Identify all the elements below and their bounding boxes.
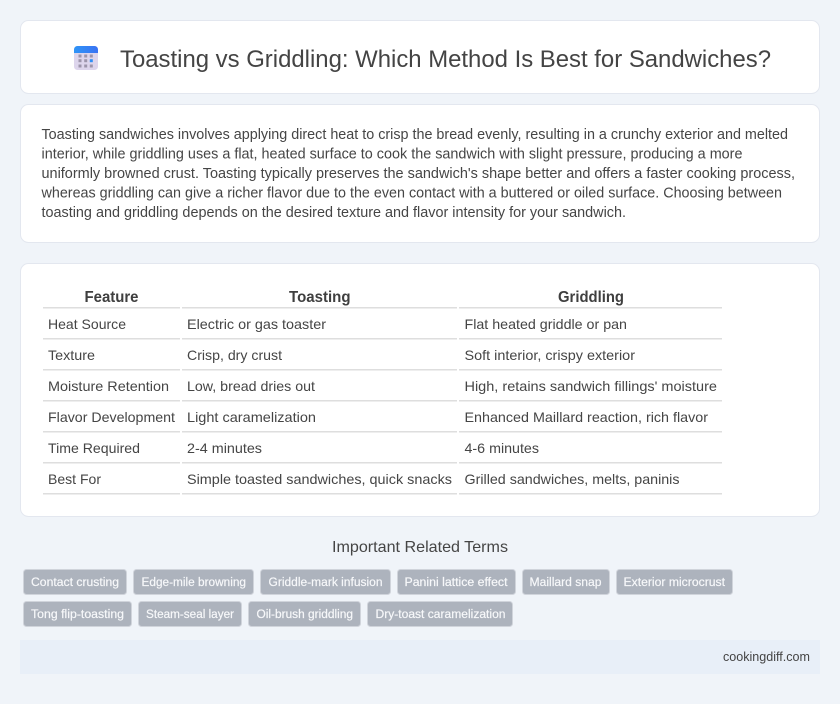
row: moisture retention: Moisture Retention <box>48 378 169 394</box>
table header <box>84 289 624 306</box>
text block: introduction paragraph: Toasting sandwiches involves applying direct heat to crisp the bread evenly, resulting in a crunchy exterior and melted <box>42 127 788 143</box>
icon: calendar <box>74 46 98 70</box>
text block: introduction paragraph: uniformly browned crust. Toasting typically preserves the sandwich's shape better and offers a faster cooking process, <box>42 166 795 182</box>
footer <box>20 640 820 674</box>
chip: tong flip-toasting <box>24 602 132 626</box>
chip: maillard snap <box>522 570 610 594</box>
chip: contact crusting <box>24 570 126 594</box>
row: time required: Time Required <box>48 440 140 456</box>
row: texture: Soft interior, crispy exterior <box>464 347 635 363</box>
table header: Toasting <box>289 289 350 306</box>
row: heat source: Electric or gas toaster <box>187 316 326 332</box>
chip: steam-seal layer <box>138 602 242 626</box>
chip: oil-brush griddling: Oil-brush griddling <box>256 607 353 621</box>
chip: oil-brush griddling <box>248 602 360 626</box>
title: Toasting vs Griddling: Which Method Is Best for Sandwiches? <box>120 46 771 73</box>
row: flavor development: Enhanced Maillard reaction, rich flavor <box>464 409 708 425</box>
text block: introduction paragraph: interior, while griddling uses a flat, heated surface to cook the sandwich with slight pressure, producing a more <box>42 146 742 162</box>
row: flavor development <box>48 409 708 425</box>
panel: introduction <box>20 104 820 242</box>
panel: comparison table <box>20 264 820 516</box>
chip: tong flip-toasting: Tong flip-toasting <box>31 607 124 621</box>
chip: griddle-mark infusion: Griddle-mark infusion <box>268 575 383 589</box>
chip: panini lattice effect: Panini lattice effect <box>404 575 508 589</box>
row: texture: Texture <box>48 347 95 363</box>
row: heat source: Flat heated griddle or pan <box>464 316 627 332</box>
chip: exterior microcrust <box>616 570 732 594</box>
chip: dry-toast caramelization <box>368 602 512 626</box>
chip: steam-seal layer: Steam-seal layer <box>146 607 234 621</box>
footer: cookingdiff.com <box>723 650 810 664</box>
table header: Griddling <box>558 289 624 306</box>
row: best for: Simple toasted sandwiches, quick snacks <box>187 471 452 487</box>
text block: introduction paragraph: toasting and griddling depends on the desired texture and flavor intensity for your sandwich. <box>42 205 626 221</box>
chip: exterior microcrust: Exterior microcrust <box>624 575 726 589</box>
text block: introduction paragraph: whereas griddling can give a richer flavor due to the even contact with a buttered or oiled surface. Choosing between <box>41 186 782 202</box>
related terms chips <box>24 570 732 626</box>
row: time required <box>48 440 539 456</box>
chip: edge-mile browning <box>134 570 254 594</box>
chip: dry-toast caramelization: Dry-toast caramelization <box>376 607 506 621</box>
row: best for: Best For <box>48 471 101 487</box>
chip: maillard snap: Maillard snap <box>530 575 602 589</box>
row: heat source <box>48 316 627 332</box>
text block: introduction paragraph <box>41 127 795 221</box>
row: flavor development: Light caramelization <box>187 409 316 425</box>
row: time required: 2-4 minutes <box>187 440 262 456</box>
row: best for: Grilled sandwiches, melts, paninis <box>464 471 680 487</box>
row: best for <box>48 471 680 487</box>
row: time required: 4-6 minutes <box>464 440 539 456</box>
chip: panini lattice effect <box>398 570 516 594</box>
row: moisture retention <box>48 378 717 394</box>
chip: edge-mile browning: Edge-mile browning <box>142 575 246 589</box>
table header: Feature <box>84 289 139 306</box>
chip: contact crusting: Contact crusting <box>31 575 119 589</box>
row: moisture retention: Low, bread dries out <box>187 378 315 394</box>
row: moisture retention: High, retains sandwich fillings' moisture <box>464 378 717 394</box>
row: texture <box>48 347 635 363</box>
panel: header <box>20 20 820 94</box>
row: texture: Crisp, dry crust <box>187 347 282 363</box>
chip: griddle-mark infusion <box>260 570 390 594</box>
row: heat source: Heat Source <box>48 316 126 332</box>
heading: important related terms: Important Related Terms <box>332 539 508 556</box>
row: flavor development: Flavor Development <box>48 409 175 425</box>
